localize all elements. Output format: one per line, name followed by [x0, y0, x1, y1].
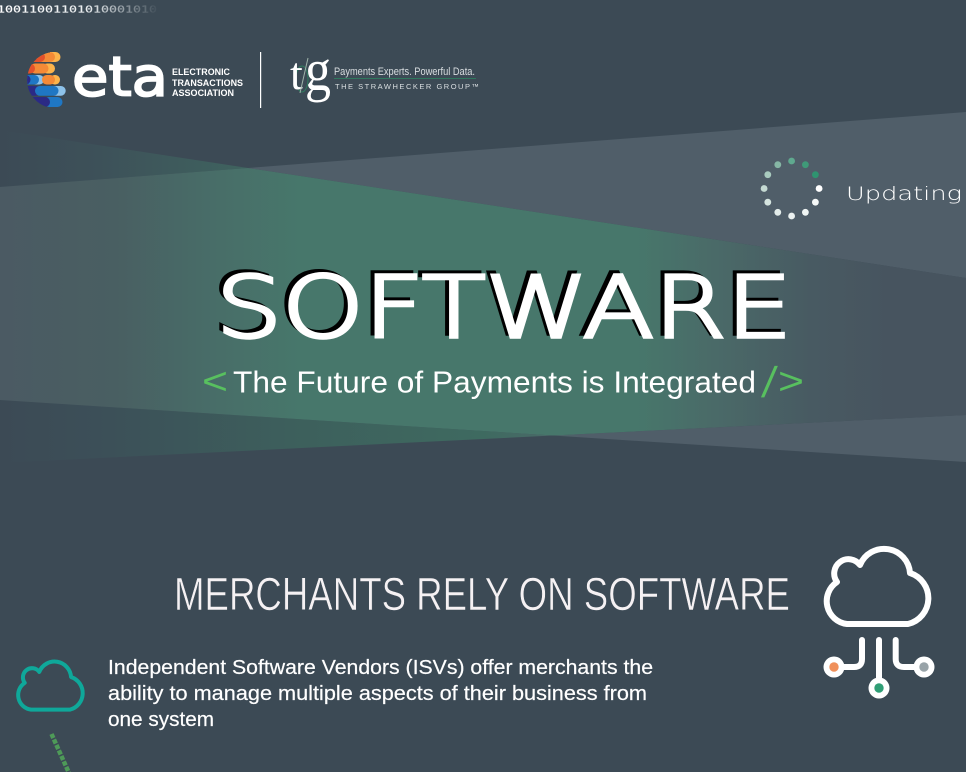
subtitle — [202, 359, 804, 407]
monogram: g — [305, 37, 331, 103]
closing bracket slash: / — [759, 359, 780, 407]
closing bracket: > — [778, 361, 804, 403]
logo tagline: TRANSACTIONS — [172, 78, 243, 88]
logo tagline: ASSOCIATION — [172, 88, 234, 98]
icon: teal cloud — [18, 662, 83, 710]
logo wordmark: eta — [72, 46, 168, 108]
logo: ETA — [27, 52, 243, 107]
body text: Independent Software Vendors (ISVs) offer merchants the — [108, 656, 653, 679]
logo divider — [260, 52, 261, 108]
icon: cloud with circuit nodes — [824, 549, 934, 698]
body text: one system — [108, 708, 214, 731]
body text — [108, 656, 653, 731]
icon: ETA striped globe — [27, 52, 66, 107]
subtitle text: The Future of Payments is Integrated — [233, 366, 756, 400]
opening bracket: < — [202, 361, 228, 403]
updating label: Updating — [846, 183, 962, 205]
title: SOFTWARE — [216, 259, 792, 358]
slogan: Payments Experts. Powerful Data. — [334, 66, 475, 78]
logo tagline — [172, 67, 243, 98]
section heading: MERCHANTS RELY ON SOFTWARE — [174, 568, 790, 620]
body text: ability to manage multiple aspects of their business from — [108, 682, 647, 705]
monogram — [290, 37, 331, 103]
logo tagline: ELECTRONIC — [172, 67, 230, 77]
monogram: t — [290, 48, 303, 99]
title: SOFTWARE — [212, 256, 788, 355]
dashed connector line — [52, 734, 69, 772]
logo: The Strawhecker Group — [290, 37, 479, 103]
icon: loading spinner — [761, 158, 822, 219]
company name: THE STRAWHECKER GROUP™ — [335, 82, 479, 91]
binary code strip: 10011001101010001010 — [0, 4, 157, 16]
